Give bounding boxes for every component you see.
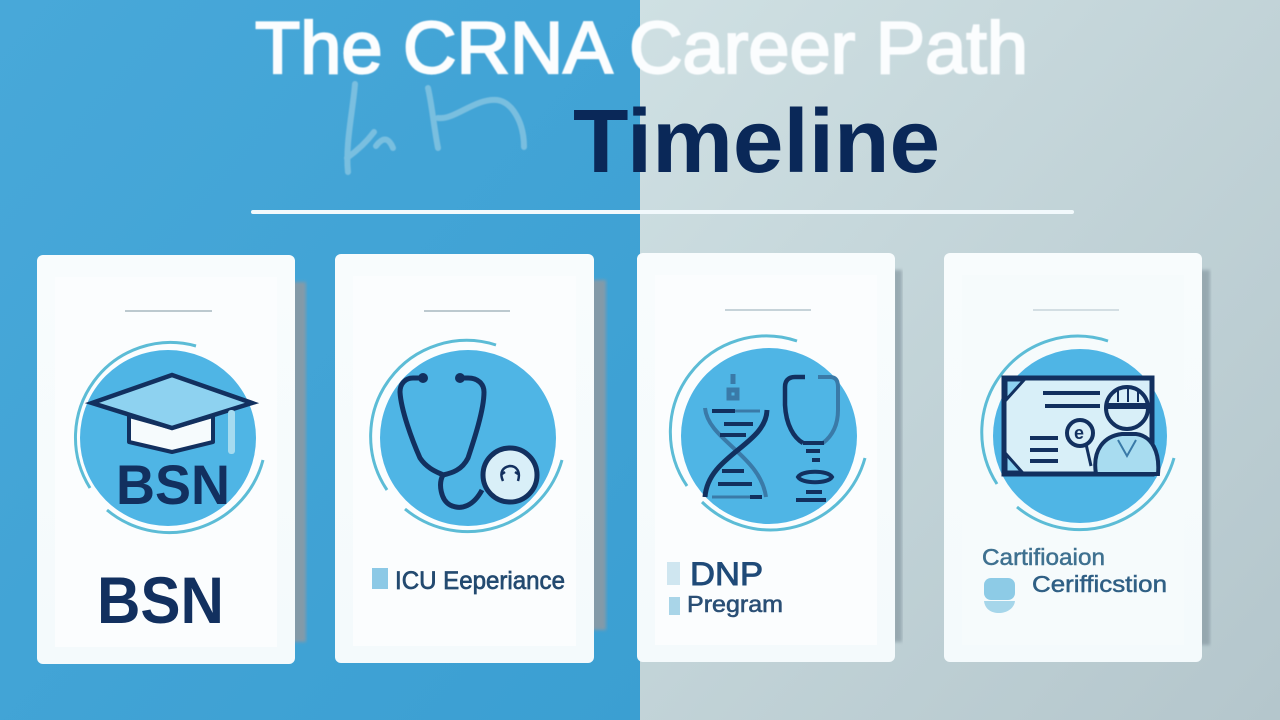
label: DNP Program: DNP	[690, 556, 763, 592]
label: DNP Program	[667, 556, 783, 617]
label: Certification	[982, 544, 1167, 613]
label: BSN: BSN	[97, 563, 224, 637]
decorative signature scribble	[347, 84, 524, 172]
icon: DNA helix and stethoscope in circle	[670, 336, 865, 530]
panel: Certification card	[944, 253, 1210, 662]
icon: graduation cap in circle: BSN	[116, 453, 230, 516]
label: Certification: Cartifioaion	[982, 544, 1105, 570]
icon: stethoscope in circle	[371, 340, 562, 532]
title divider line	[251, 210, 1074, 214]
panel: DNP Program card	[637, 253, 902, 662]
panel: ICU Experience card	[335, 254, 606, 663]
label: DNP Program: Pregram	[687, 591, 783, 617]
background: blue left half	[0, 0, 640, 720]
label: ICU Experience: ICU Eeperiance	[395, 567, 565, 595]
subtitle: Timeline: Timeline	[573, 92, 940, 192]
title: The CRNA Career Path: The CRNA Career Path	[255, 8, 1028, 89]
background: grey right half	[640, 0, 1280, 720]
icon: certificate with person in circle	[982, 336, 1174, 530]
icon: certificate with person in circle: e	[1074, 423, 1084, 443]
panel: BSN card	[37, 255, 306, 664]
label: Certification: Cerifficstion	[1032, 571, 1167, 597]
icon: graduation cap in circle	[75, 343, 263, 533]
